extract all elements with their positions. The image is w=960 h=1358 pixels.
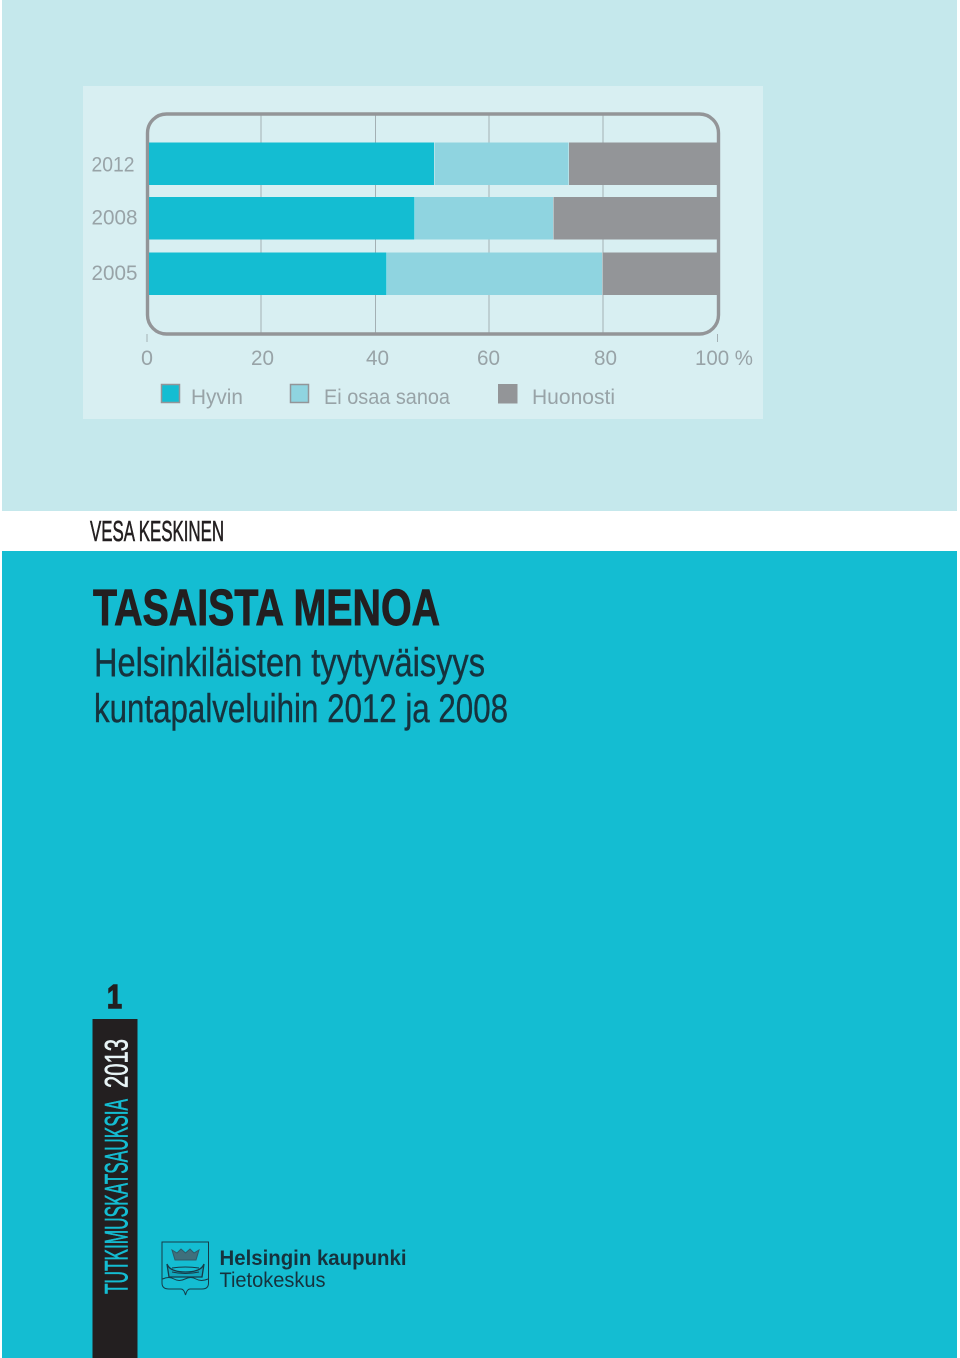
- axis labels: 0: [141, 347, 153, 370]
- year labels: 2005: [92, 262, 138, 285]
- chart frame: [148, 114, 718, 334]
- legend: [162, 384, 615, 409]
- year labels: [92, 154, 138, 285]
- icon: Helsinki coat of arms: [162, 1242, 208, 1295]
- subtitle: kuntapalveluihin 2012 ja 2008: [94, 687, 508, 731]
- subtitle: [94, 641, 508, 731]
- legend: Hyvin: [191, 386, 243, 409]
- axis labels: 80: [594, 347, 617, 370]
- axis labels: 60: [477, 347, 500, 370]
- title: TASAISTA MENOA: [93, 579, 440, 636]
- author name: VESA KESKINEN: [90, 516, 224, 548]
- legend: Huonosti: [532, 386, 615, 409]
- series number: 1: [107, 978, 122, 1015]
- subtitle: Helsinkiläisten tyytyväisyys: [94, 641, 485, 685]
- bar: 2012: [149, 142, 719, 185]
- panel: lower teal background: [2, 551, 957, 1358]
- organisation name: Helsingin kaupunki: [220, 1247, 406, 1270]
- axis labels: 20: [251, 347, 274, 370]
- organisation name: Tietokeskus: [220, 1269, 326, 1292]
- bar: 2008: [149, 197, 719, 240]
- series spine: [92, 1019, 138, 1358]
- axis labels: 100 %: [695, 347, 753, 370]
- year labels: 2008: [92, 206, 138, 230]
- axis labels: 40: [366, 347, 389, 370]
- series year: 2013: [98, 1039, 134, 1088]
- bar: 2005: [149, 252, 719, 295]
- organisation name: [220, 1247, 406, 1292]
- year labels: 2012: [92, 154, 134, 176]
- axis labels: [141, 347, 753, 370]
- panel: top light background: [2, 0, 957, 511]
- legend: Ei osaa sanoa: [324, 386, 450, 409]
- panel: chart: [83, 86, 763, 419]
- series name: TUTKIMUSKATSAUKSIA: [98, 1099, 134, 1294]
